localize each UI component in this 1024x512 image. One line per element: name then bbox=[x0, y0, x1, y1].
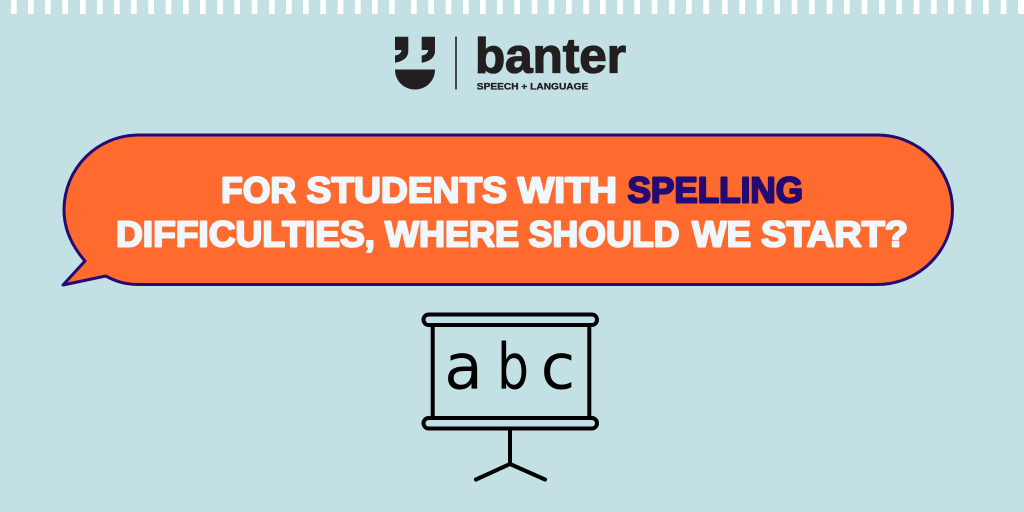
headline line 1: WITH bbox=[518, 170, 617, 210]
screen letters: a bbox=[444, 330, 483, 404]
headline line 2: SHOULD bbox=[528, 214, 680, 254]
icon: smiling face mark bbox=[395, 37, 435, 90]
top edge white tick strip bbox=[11, 0, 1024, 14]
headline line 1: SPELLING bbox=[628, 170, 803, 210]
headline line 1: FOR bbox=[221, 170, 296, 210]
screen frame and stand bbox=[424, 314, 597, 480]
logo wordmark: banter bbox=[475, 30, 626, 84]
logo: banter speech + language bbox=[395, 30, 626, 91]
screen letters bbox=[444, 330, 575, 404]
headline bbox=[116, 170, 908, 254]
speech bubble callout bbox=[63, 135, 952, 285]
icon: projection screen with abc bbox=[424, 314, 597, 480]
screen letters: c bbox=[541, 330, 575, 404]
headline line 1: STUDENTS bbox=[306, 170, 507, 210]
headline line 2: DIFFICULTIES, bbox=[116, 214, 375, 254]
logo tagline: SPEECH + LANGUAGE bbox=[477, 81, 588, 91]
headline line 2: START? bbox=[761, 214, 908, 254]
screen letters: b bbox=[497, 330, 529, 404]
headline line 2: WE bbox=[692, 214, 751, 254]
logo divider bbox=[455, 36, 457, 90]
headline line 2: WHERE bbox=[385, 214, 519, 254]
